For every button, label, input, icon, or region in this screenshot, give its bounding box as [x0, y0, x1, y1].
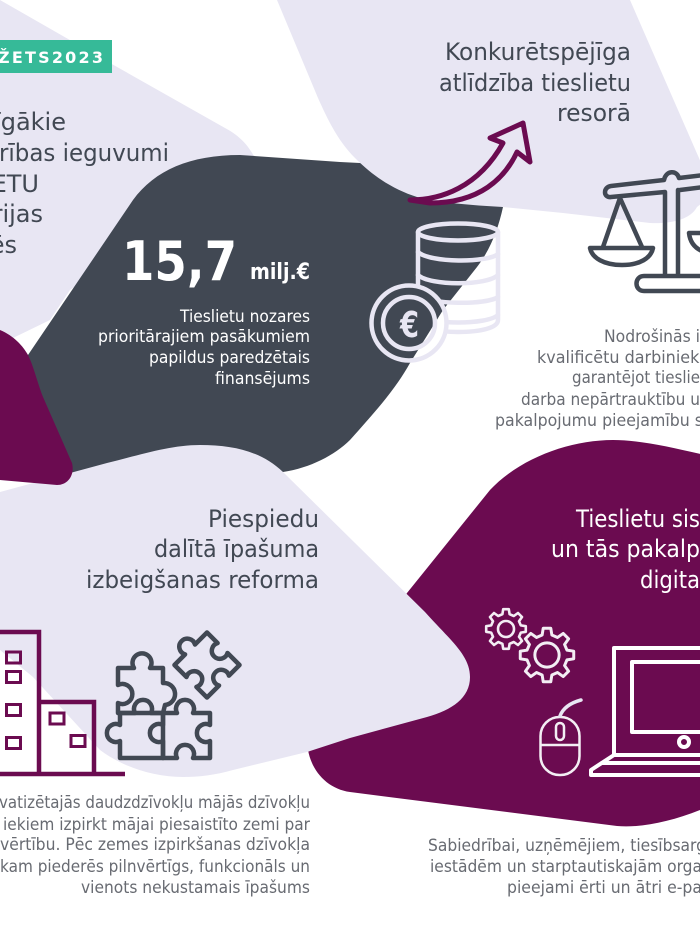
- panel: top-right lilac blob: [277, 0, 700, 223]
- panel: lower lilac blob: [0, 445, 470, 777]
- text: land reform description: kam piederēs pilnvērtīgs, funkcionāls un: [0, 857, 310, 876]
- heading: land reform: dalītā īpašuma: [154, 535, 319, 563]
- icon: coin stack: [372, 224, 498, 360]
- panel: dark funding blob: [0, 155, 503, 490]
- heading: digitalisation: [551, 505, 700, 594]
- heading: competitive pay: [439, 38, 631, 127]
- text: land reform description: [0, 793, 310, 897]
- tag: budget 2023: ŽETS2023: [0, 48, 103, 67]
- panel: purple digitalisation blob: [308, 440, 700, 826]
- text: competitive pay description: [495, 327, 700, 430]
- stat: 15,7 million euro: 15,7: [122, 230, 237, 293]
- text: land reform description: iekiem izpirkt mājai piesaistīto zemi par: [3, 815, 310, 834]
- text: funding description: prioritārajiem pasākumiem: [98, 327, 310, 346]
- title: main benefits: rības ieguvumi: [0, 139, 169, 167]
- title: main benefits: [0, 108, 169, 259]
- panel: left purple blob: [0, 330, 73, 485]
- icon: laptop: [591, 648, 700, 775]
- heading: competitive pay: Konkurētspējīga: [445, 38, 631, 66]
- text: funding description: finansējums: [215, 369, 310, 388]
- heading: land reform: izbeigšanas reforma: [86, 566, 319, 594]
- text: funding description: [98, 307, 310, 388]
- heading: competitive pay: resorā: [557, 99, 631, 127]
- icon: buildings: [0, 632, 125, 774]
- text: digitalisation description: [428, 836, 700, 897]
- icon: puzzle: [107, 624, 240, 758]
- heading: competitive pay: atlīdzība tieslietu: [439, 69, 631, 97]
- text: land reform description: vienots nekustamais īpašums: [81, 878, 310, 897]
- text: land reform description: vērtību. Pēc zemes izpirkšanas dzīvokļa: [0, 835, 310, 854]
- icon: computer mouse: [540, 700, 581, 775]
- icon: scales: [590, 172, 700, 291]
- icon: coin stack: €: [399, 305, 419, 346]
- icon: gears: [486, 609, 574, 682]
- text: funding description: Tieslietu nozares: [179, 307, 310, 326]
- panel: top-left lilac blob: [0, 0, 255, 345]
- text: funding description: papildus paredzētais: [149, 348, 310, 367]
- heading: land reform: Piespiedu: [208, 505, 319, 533]
- text: land reform description: vatizētajās daudzdzīvokļu mājās dzīvokļu: [0, 793, 310, 812]
- tag: budget 2023: [0, 40, 112, 73]
- icon: rising arrow: [410, 123, 530, 203]
- heading: land reform: [86, 505, 319, 594]
- stat: 15,7 million euro: milj.€: [250, 260, 310, 285]
